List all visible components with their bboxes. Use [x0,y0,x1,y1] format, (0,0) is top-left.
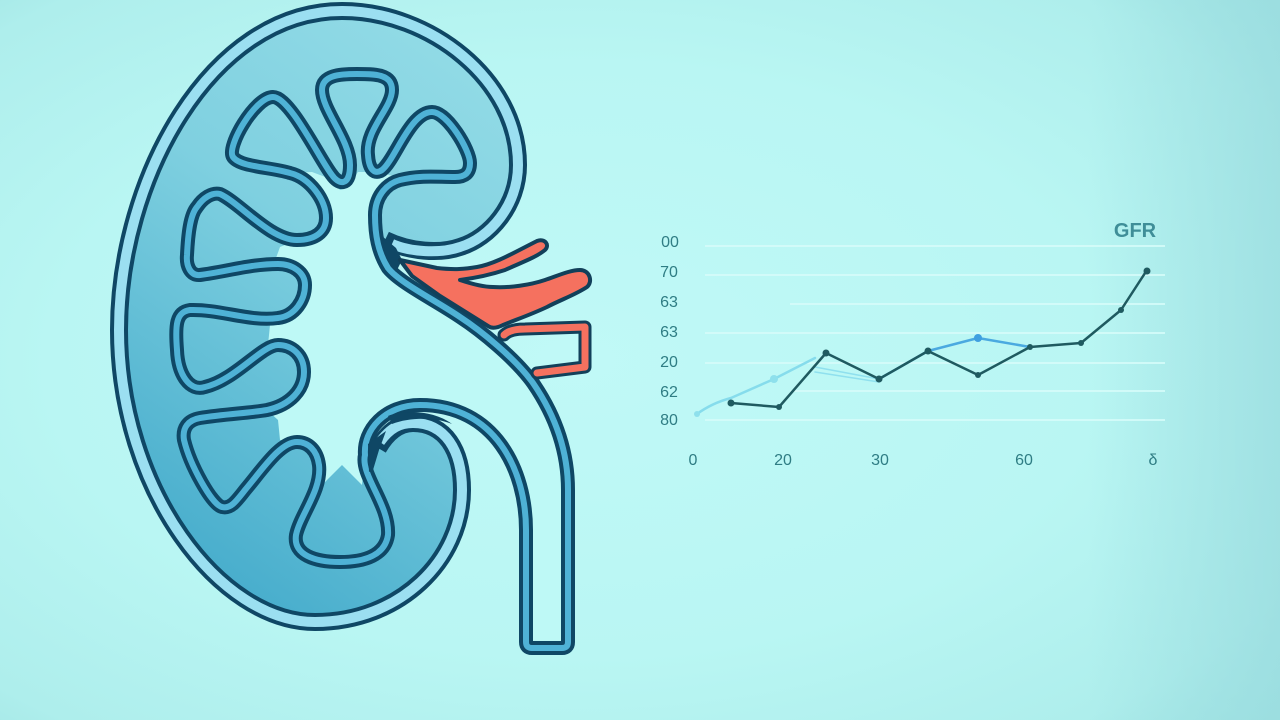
light blue series [694,334,1030,417]
line chart: GFR [660,220,1165,469]
grid lines [705,246,1165,420]
chart title: GFR [1114,220,1157,242]
x-axis labels: 0 [689,452,698,469]
x-axis labels: 20 [774,452,792,469]
renal vein bracket [504,327,585,373]
y-axis labels: 20 [660,354,678,371]
x-axis labels [689,452,1158,469]
kidney capsule [119,11,518,622]
kidney illustration [119,11,590,648]
y-axis labels: 63 [660,324,678,341]
dark junction wedges [368,236,452,472]
y-axis labels: 70 [660,264,678,281]
y-axis labels: 00 [661,234,679,251]
renal pelvis and ureter interior [267,172,568,648]
y-axis labels [660,234,679,429]
y-axis labels: 62 [660,384,678,401]
x-axis labels: 60 [1015,452,1033,469]
x-axis labels: δ [1149,452,1158,469]
y-axis labels: 80 [660,412,678,429]
calyx loops and ureter wall [176,74,568,648]
renal artery [400,240,590,328]
x-axis labels: 30 [871,452,889,469]
dark series [728,268,1150,410]
kidney cortex fill [119,11,518,622]
y-axis labels: 63 [660,294,678,311]
